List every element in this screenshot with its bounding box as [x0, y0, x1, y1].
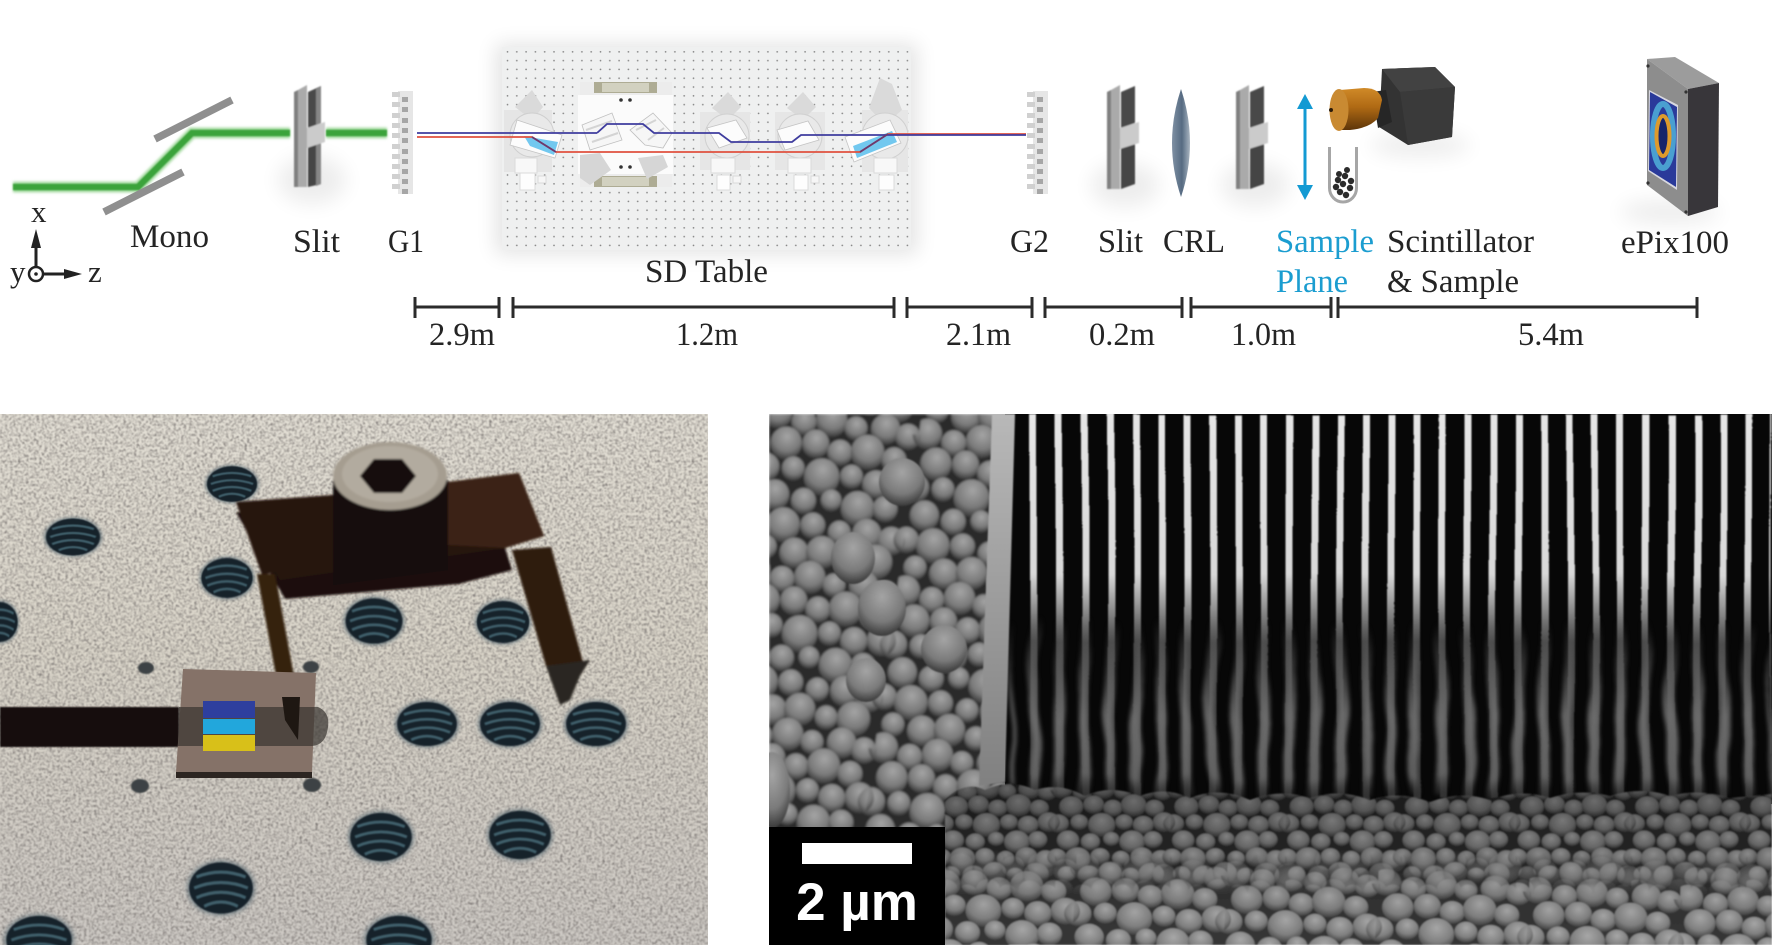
text: Sample Plane: Sample: [1276, 224, 1374, 260]
beam: two-colour interferometer paths: [417, 124, 1026, 152]
text: G1: G1: [388, 224, 424, 260]
grating lines lower: [1010, 620, 1772, 798]
dimension labels: 1.2m: [676, 317, 738, 353]
text: Slit: Slit: [1098, 224, 1143, 260]
grain texture: left substrate: [769, 414, 1009, 945]
mirror mount 1: [504, 90, 562, 190]
text: Mono: Mono: [130, 219, 209, 255]
grating lines upper: [1015, 414, 1772, 799]
mirror mount 2: [700, 92, 750, 190]
icon: coordinate axes: x: [31, 194, 47, 229]
icon: coordinate axes: [10, 194, 102, 289]
dimension labels: 2.1m: [946, 317, 1011, 353]
text: SD Table: SD Table: [645, 254, 768, 290]
panel: SEM micrograph: [754, 414, 1772, 945]
icon: grating G2: [1027, 91, 1048, 194]
panel: photograph of sample holder: [0, 414, 708, 945]
panel: SD Table breadboard: [496, 44, 917, 254]
icon: ePix100 detector: [1646, 57, 1719, 216]
dimension labels: [429, 317, 1584, 353]
mirror mount 3: [775, 92, 825, 190]
central mirror block: [578, 82, 673, 187]
text: CRL: CRL: [1163, 224, 1225, 260]
icon: slit 2: [1107, 85, 1139, 189]
text: Slit: Slit: [293, 224, 340, 260]
arrow: sample plane translation: [1297, 94, 1313, 200]
shadow strip under chip: [0, 707, 179, 747]
colour-banded grating: [203, 701, 255, 751]
small pin holes: [131, 661, 321, 793]
text: Sample Plane: [1276, 224, 1374, 300]
beam: incoming through mono to slit and G1: [13, 133, 387, 187]
text: Scintillator & Sample: & Sample: [1387, 264, 1519, 300]
screw holes: [0, 464, 629, 945]
scale bar box: [768, 827, 945, 945]
icon: slit 3: [1236, 85, 1268, 189]
soft shadows behind optics: [278, 133, 1720, 224]
large surface grains: [754, 458, 967, 828]
text: Sample Plane: Plane: [1276, 264, 1348, 300]
text: G2: G2: [1010, 224, 1049, 260]
scale bar box: 2 µm: [796, 873, 918, 932]
sample clip: [236, 442, 590, 705]
grain texture: floor substrate: [945, 784, 1772, 945]
icon: grating G1: [392, 91, 413, 194]
icon: coordinate axes: z: [88, 254, 102, 289]
dimension labels: 2.9m: [429, 317, 495, 353]
dimension labels: 1.0m: [1231, 317, 1296, 353]
beam: segments after G2: [1049, 130, 1633, 140]
icon: compound refractive lens: [1172, 89, 1190, 197]
dimension labels: 0.2m: [1089, 317, 1155, 353]
text: ePix100: ePix100: [1621, 225, 1729, 261]
icon: coordinate axes: y: [10, 254, 26, 289]
icon: slit 1: [294, 85, 325, 187]
text: Scintillator & Sample: [1387, 224, 1534, 300]
mirror mount 4: [845, 78, 908, 190]
sample chip on window: [176, 669, 328, 778]
text: Scintillator & Sample: Scintillator: [1387, 224, 1534, 260]
panel: beamline schematic: [10, 44, 1729, 353]
icon: scintillator camera: [1329, 67, 1455, 145]
icon: sample tube: [1330, 147, 1356, 202]
icon: monochromator crystals: [104, 100, 232, 212]
dimension labels: 5.4m: [1518, 317, 1584, 353]
nanostructure wall: dark trenches: [1005, 414, 1772, 804]
dimension scale bars: [415, 297, 1697, 318]
wall edge: [979, 414, 1015, 786]
